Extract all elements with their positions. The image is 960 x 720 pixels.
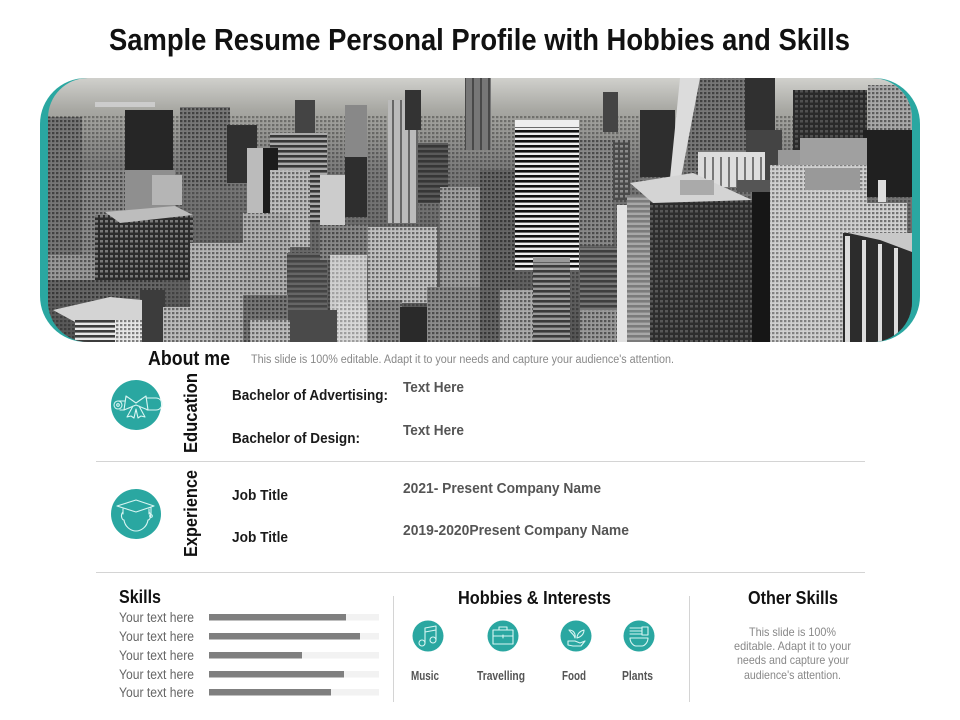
experience list <box>232 481 629 546</box>
other skills text <box>734 625 851 682</box>
label: experience: Experience <box>181 470 201 557</box>
hobby labels: Music <box>411 669 439 683</box>
heading: hobbies and interests: Hobbies & Interests <box>458 588 611 608</box>
education list: Bachelor of Advertising: <box>232 388 388 404</box>
heading: skills: Skills <box>119 587 161 607</box>
other skills text: This slide is 100% <box>749 625 836 639</box>
experience list: 2019-2020Present Company Name <box>403 523 629 539</box>
experience list: Job Title <box>232 488 288 504</box>
skills bar chart: Your text here <box>119 685 194 700</box>
title: Sample Resume Personal Profile with Hobbies and Skills <box>109 23 850 57</box>
photo banner: city skyline with teal frame <box>40 78 920 342</box>
education list: Text Here <box>403 380 464 396</box>
education list: Bachelor of Design: <box>232 431 360 447</box>
skills bar chart: Your text here <box>119 610 194 625</box>
skills bar chart: Your text here <box>119 648 194 663</box>
other skills text: audience's attention. <box>744 668 841 682</box>
hobby labels: Food <box>562 669 586 683</box>
skills bar chart <box>119 610 379 700</box>
icon: travelling <box>488 620 518 652</box>
hobby labels <box>411 669 653 683</box>
other skills text: needs and capture your <box>737 653 849 667</box>
heading: other skills: Other Skills <box>748 588 838 608</box>
icon: music <box>412 620 444 652</box>
about me description: This slide is 100% editable. Adapt it to your needs and capture your audience's attention. <box>251 354 674 366</box>
hobby labels: Travelling <box>477 669 525 683</box>
icon: food <box>560 620 592 652</box>
experience list: Job Title <box>232 530 288 546</box>
icon: diploma <box>111 380 162 430</box>
heading: about me: About me <box>148 348 230 370</box>
other skills text: editable. Adapt it to your <box>734 639 851 653</box>
skills bar chart: Your text here <box>119 667 194 682</box>
education list: Text Here <box>403 423 464 439</box>
education list <box>232 380 464 447</box>
icon: graduate <box>111 489 161 539</box>
experience list: 2021- Present Company Name <box>403 481 601 497</box>
hobby labels: Plants <box>622 669 653 683</box>
label: education: Education <box>181 373 201 453</box>
icon: plants <box>624 620 654 652</box>
skills bar chart: Your text here <box>119 629 194 644</box>
